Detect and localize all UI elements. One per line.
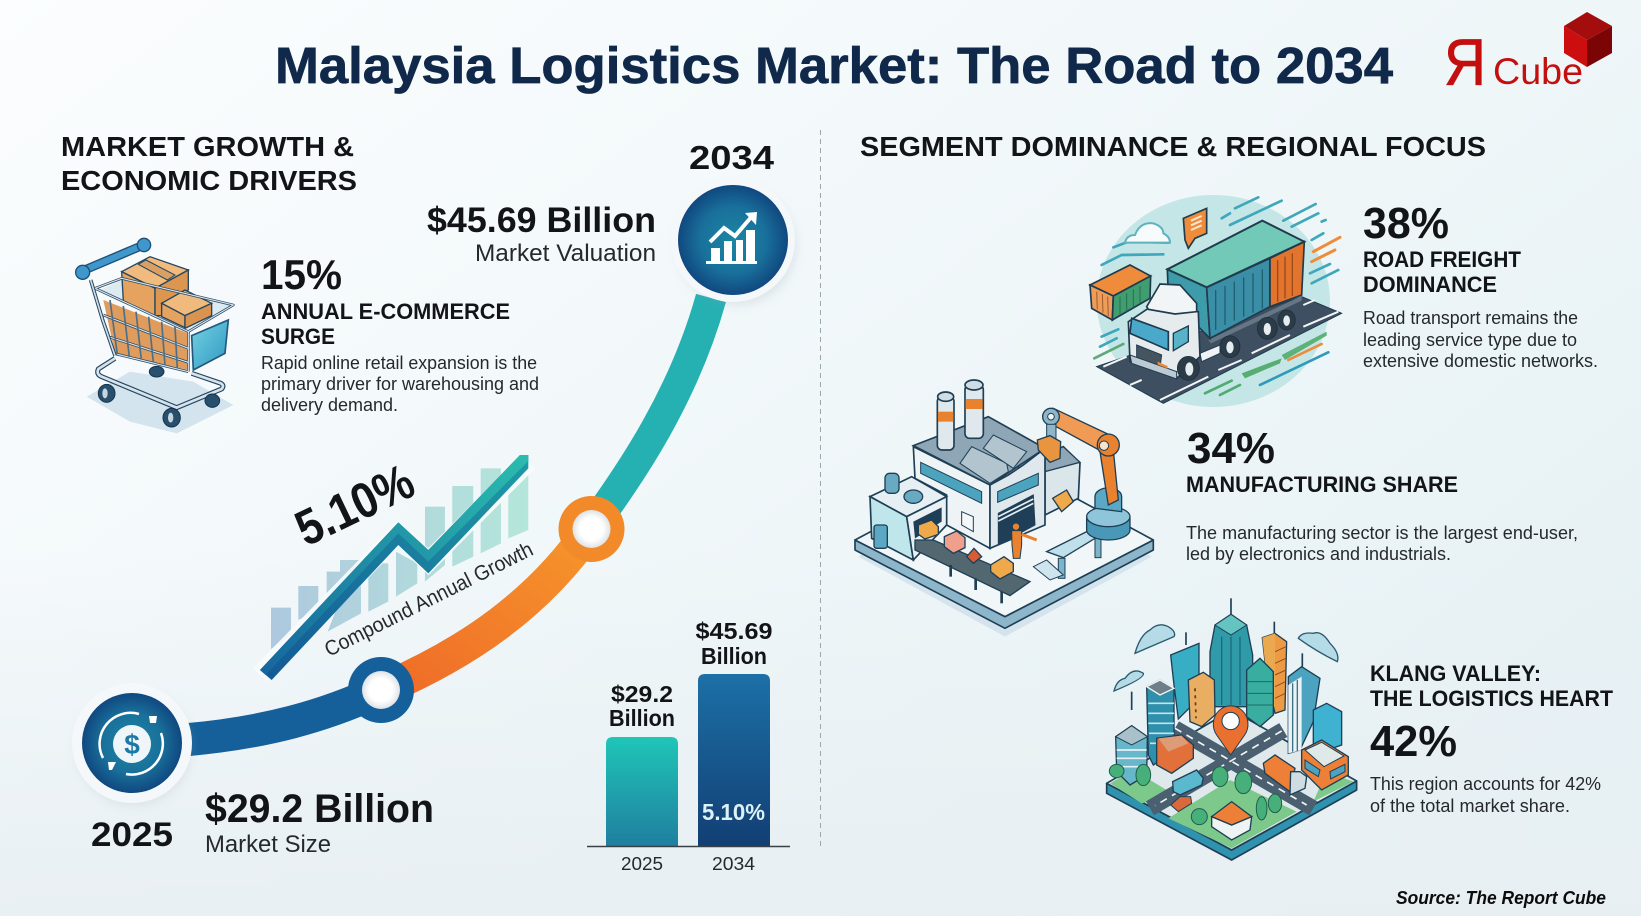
logo: R Cube: Cube xyxy=(1493,51,1583,92)
bar chart: market size: $29.2 xyxy=(611,681,673,707)
stat: road freight: Road transport remains the xyxy=(1363,308,1578,328)
stat: road freight: leading service type due to xyxy=(1363,330,1577,350)
section heading: segment dominance: SEGMENT DOMINANCE & REGIONAL FOCUS xyxy=(860,131,1486,162)
stat: road freight: DOMINANCE xyxy=(1363,272,1497,297)
stat: e-commerce surge: SURGE xyxy=(261,324,335,349)
stat: manufacturing share: led by electronics and industrials. xyxy=(1186,544,1451,564)
icon: city map xyxy=(1107,598,1357,860)
stat: Klang Valley: This region accounts for 42% xyxy=(1370,774,1601,794)
stat: e-commerce surge: ANNUAL E-COMMERCE xyxy=(261,299,510,324)
growth road curve xyxy=(184,298,711,740)
milestone node: upper xyxy=(558,496,624,562)
CAGR mini chart: Compound Annual Growth xyxy=(321,538,537,661)
bar chart: market size: Billion xyxy=(609,705,675,731)
stat: Klang Valley: THE LOGISTICS HEART xyxy=(1370,686,1614,711)
stat: manufacturing share xyxy=(1186,424,1578,564)
bar chart: market size: Billion xyxy=(701,643,767,669)
stat: manufacturing share: MANUFACTURING SHARE xyxy=(1186,472,1458,497)
icon: 2025 dollar badge xyxy=(72,683,192,804)
stat: road freight xyxy=(1363,199,1598,371)
milestone 2025 label: $29.2 Billion xyxy=(205,787,434,831)
stat: Klang Valley: KLANG VALLEY: xyxy=(1370,661,1541,686)
stat: e-commerce surge: Rapid online retail expansion is the xyxy=(261,353,537,373)
CAGR mini chart: 5.10% xyxy=(287,453,423,557)
milestone 2034 label: 2034 xyxy=(689,139,775,176)
bar chart: market size: 2034 xyxy=(712,854,755,874)
bar chart: market size: 5.10% xyxy=(702,799,765,825)
milestone node: lower xyxy=(348,657,414,723)
stat: manufacturing share: 34% xyxy=(1187,424,1275,473)
milestone 2034 label xyxy=(427,139,775,267)
CAGR mini chart xyxy=(260,453,537,680)
stat: road freight: extensive domestic networks. xyxy=(1363,351,1598,371)
stat: manufacturing share: The manufacturing sector is the largest end-user, xyxy=(1186,523,1578,543)
stat: e-commerce surge xyxy=(261,251,539,415)
logo: R Cube xyxy=(1444,12,1612,99)
stat: e-commerce surge: delivery demand. xyxy=(261,395,398,415)
stat: e-commerce surge: 15% xyxy=(261,251,342,298)
section heading: market growth: ECONOMIC DRIVERS xyxy=(61,165,357,196)
icon: shopping cart xyxy=(76,238,233,433)
section heading: market growth: MARKET GROWTH & xyxy=(61,131,354,162)
stat: road freight: ROAD FREIGHT xyxy=(1363,247,1522,272)
stat: road freight: 38% xyxy=(1363,199,1449,248)
icon: factory xyxy=(855,380,1153,637)
stat: Klang Valley: of the total market share. xyxy=(1370,796,1570,816)
bar chart: market size: 2025 xyxy=(621,854,663,874)
icon: container truck xyxy=(1090,195,1342,407)
bar chart: market size xyxy=(587,618,790,874)
milestone 2025 label: Market Size xyxy=(205,831,331,858)
bar chart: market size: $45.69 xyxy=(696,618,772,644)
title: Malaysia Logistics Market: The Road to 2034 xyxy=(275,37,1394,94)
icon: 2034 chart badge xyxy=(671,178,795,304)
logo: R Cube: Я xyxy=(1444,25,1486,99)
stat: Klang Valley xyxy=(1370,661,1614,816)
stat: Klang Valley: 42% xyxy=(1370,717,1457,766)
milestone 2025 label: 2025 xyxy=(91,816,173,854)
source note: Source: The Report Cube xyxy=(1396,888,1606,908)
divider xyxy=(820,130,822,846)
icon: 2025 dollar badge: $ xyxy=(124,729,140,760)
milestone 2034 label: $45.69 Billion xyxy=(427,201,656,240)
stat: e-commerce surge: primary driver for warehousing and xyxy=(261,374,539,394)
milestone 2025 label xyxy=(91,787,434,858)
section heading: market growth xyxy=(61,131,357,196)
milestone 2034 label: Market Valuation xyxy=(475,240,656,267)
